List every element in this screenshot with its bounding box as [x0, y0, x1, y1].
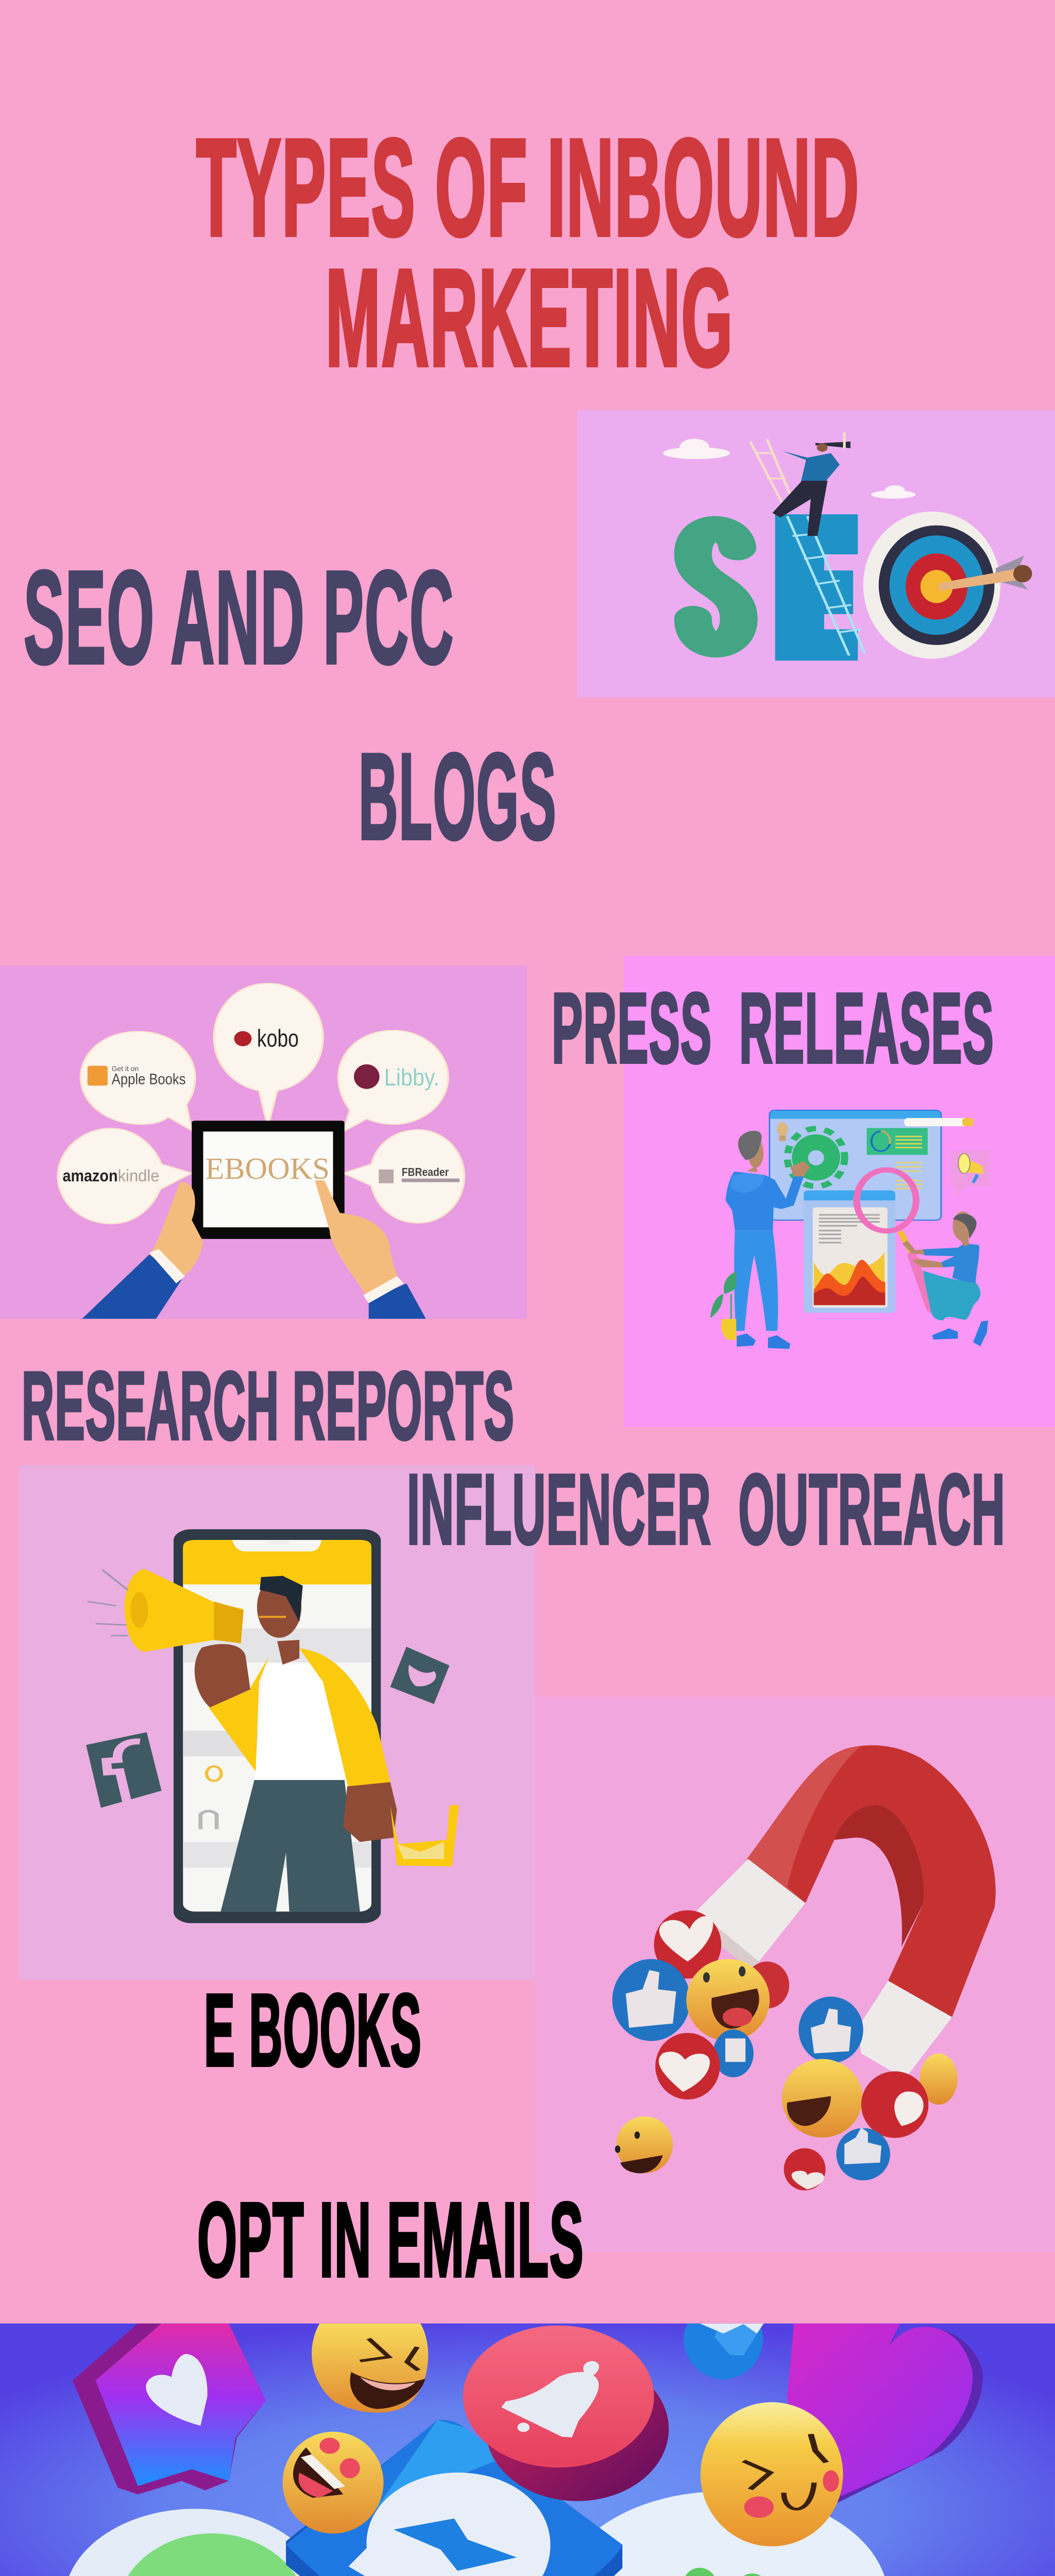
reaction: small yellow right — [920, 2054, 958, 2105]
icon: messenger — [286, 2420, 622, 2576]
reaction: heart right lower — [861, 2071, 928, 2138]
logo: amazon kindle: kindle — [118, 1166, 160, 1185]
icon: white chat dots — [600, 2492, 884, 2576]
title — [196, 110, 860, 395]
tablet: EBOOKS — [205, 1153, 330, 1186]
text: RESEARCH REPORTS — [22, 1352, 515, 1460]
icon: winking emoji — [701, 2402, 843, 2546]
icon: purple heart — [787, 2324, 983, 2503]
logo: Apple Books: Get it on — [112, 1065, 139, 1073]
reaction: thumbs up small — [836, 2127, 890, 2180]
panel: SEO illustration — [577, 410, 1055, 698]
megaphone badge — [951, 1150, 990, 1197]
report window with chart — [804, 1190, 895, 1313]
icon: heart-eyes emoji — [283, 2432, 383, 2534]
speech bubbles — [58, 984, 464, 1224]
icon: facebook — [86, 1732, 161, 1808]
icon: green chat — [69, 2509, 300, 2576]
floating reactions lower — [615, 2116, 890, 2191]
reaction: small heart — [784, 2148, 826, 2191]
panel: ebooks illustration: Apple Books — [112, 1071, 185, 1088]
reaction: thumbs up behind — [713, 2029, 754, 2077]
logo: amazon kindle: amazon — [62, 1166, 118, 1185]
illustration: climber with telescope — [750, 432, 849, 536]
panel: magnet illustration — [535, 1697, 1055, 2252]
man figure behind arm: legs — [734, 1230, 790, 1349]
icon: bell button — [463, 2326, 669, 2501]
woman figure — [902, 1212, 988, 1346]
illustration: press releases team — [710, 1110, 990, 1349]
icon: blue ball — [684, 2324, 763, 2380]
magnet — [693, 1745, 996, 2079]
hands and sleeves — [82, 1180, 426, 1319]
letter E with ladder — [775, 514, 864, 660]
dashboard window — [770, 1110, 974, 1220]
text: E BOOKS — [204, 1973, 422, 2088]
reaction: laughing lower — [782, 2059, 862, 2138]
icon: target with arrow — [863, 512, 1032, 659]
reaction: happy face behind — [745, 1961, 789, 2009]
logo: FBReader — [379, 1166, 460, 1183]
phone — [174, 1529, 381, 1923]
plant — [710, 1272, 736, 1340]
tablet — [192, 1121, 345, 1239]
reaction: small smile — [615, 2116, 673, 2173]
text: OPT IN EMAILS — [197, 2181, 584, 2299]
logo: Apple Books — [88, 1065, 185, 1088]
panel: ebooks illustration — [0, 965, 527, 1319]
magnifying glass — [857, 1170, 931, 1309]
reaction: laughing — [686, 1959, 770, 2041]
letter S — [693, 529, 739, 645]
panel: ebooks illustration: kobo — [257, 1025, 299, 1052]
icon: heart badge — [73, 2324, 266, 2495]
text: SEO AND PCC — [24, 544, 454, 691]
icon: mail — [390, 1805, 459, 1866]
reaction: heart — [654, 1910, 721, 1979]
icon: twitter — [390, 1647, 449, 1704]
man figure: head — [738, 1131, 763, 1172]
icon: clouds — [663, 439, 916, 499]
reaction: thumbs up right — [798, 1996, 863, 2063]
panel: influencer phone illustration — [19, 1465, 535, 1980]
influencer figure — [195, 1576, 397, 1911]
megaphone — [88, 1569, 244, 1652]
icon: laughing emoji — [312, 2324, 428, 2413]
panel: ebooks illustration: Libby. — [384, 1064, 439, 1091]
panel: social media banner — [0, 2324, 1055, 2576]
logo: kobo — [234, 1025, 299, 1052]
text: BLOGS — [359, 728, 557, 865]
reaction: thumbs up — [612, 1959, 690, 2041]
logo: FBReader: FBReader — [402, 1166, 449, 1179]
panel: press releases background — [624, 956, 1055, 1427]
reaction: heart lower — [655, 2033, 720, 2099]
man figure: hoodie — [725, 1161, 810, 1230]
logo: Libby — [354, 1064, 439, 1091]
